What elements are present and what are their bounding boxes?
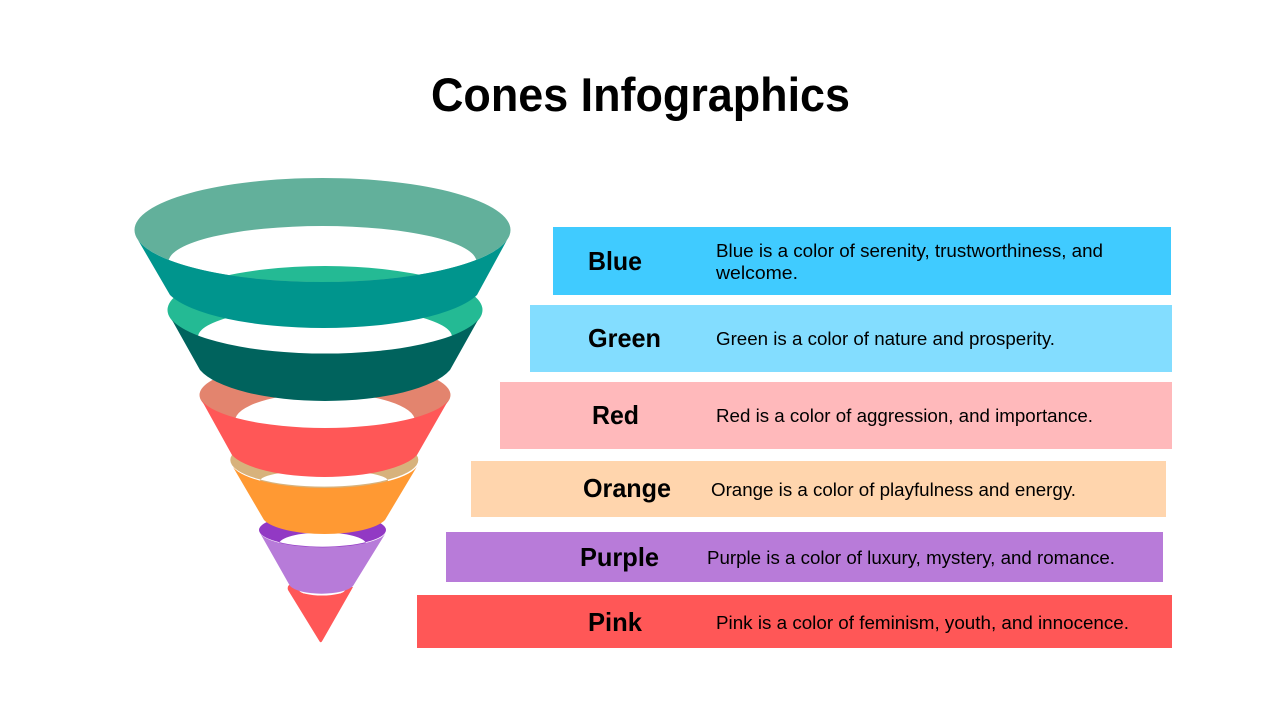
row: Orange: Orange is a color of playfulness and energy.	[711, 479, 1076, 500]
row: Red: Red	[592, 400, 639, 430]
row: Blue: Blue	[588, 246, 642, 276]
row: Purple: Purple	[580, 542, 659, 572]
row: Orange: Orange	[583, 473, 671, 503]
row: Orange	[471, 461, 1166, 517]
row: Pink	[417, 595, 1172, 648]
row: Purple: Purple is a color of luxury, mystery, and romance.	[707, 547, 1115, 568]
row: Red: Red is a color of aggression, and importance.	[716, 405, 1093, 426]
row: Purple	[446, 532, 1163, 582]
row: Blue: Blue is a color of serenity, trustworthiness, and	[716, 240, 1103, 261]
cone layer: pink tip	[288, 584, 353, 642]
cone layer: red	[200, 361, 451, 477]
row: Pink: Pink is a color of feminism, youth, and innocence.	[716, 612, 1129, 633]
row: Green: Green	[588, 323, 661, 353]
cone layer: teal	[134, 178, 510, 328]
row: Red	[500, 382, 1172, 449]
cone layer: dark green	[168, 266, 482, 401]
row: Green	[530, 305, 1172, 372]
cone layer: orange	[230, 433, 418, 534]
row: Blue: welcome.	[715, 262, 798, 283]
row: Blue	[553, 227, 1171, 295]
cone funnel	[134, 178, 510, 642]
title: Cones Infographics	[431, 68, 850, 121]
cone layer: purple	[259, 513, 386, 594]
row: Green: Green is a color of nature and prosperity.	[716, 328, 1055, 349]
row: Pink: Pink	[588, 607, 643, 637]
